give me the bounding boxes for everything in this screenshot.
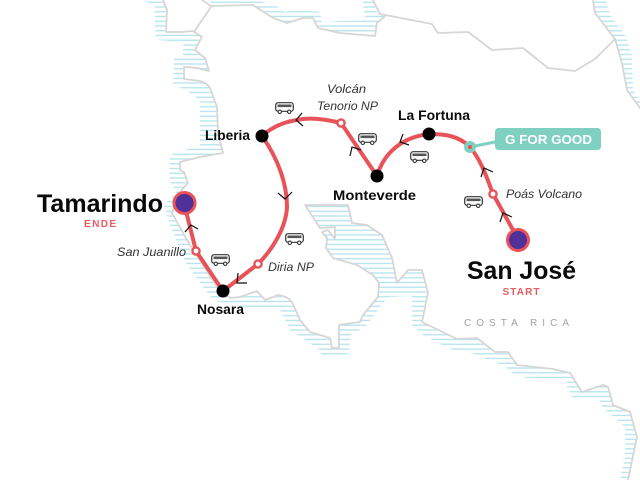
- icon: bus Tenorio to Monteverde: [359, 134, 376, 144]
- icon: bus Monteverde to La Fortuna: [411, 152, 428, 162]
- icon: bus San José to Poás: [465, 197, 482, 208]
- callout: G for Good: [464, 128, 601, 153]
- stop: San Juanillo: [192, 247, 200, 255]
- marker: Monteverde: [370, 170, 384, 182]
- marker: Liberia: [256, 130, 268, 142]
- label: START: START: [502, 287, 540, 298]
- coastline and borders: [163, 0, 640, 480]
- callout: G for Good: G FOR GOOD: [505, 132, 592, 147]
- label: La Fortuna: La Fortuna: [398, 108, 471, 123]
- sea hatching: [140, 0, 640, 480]
- marker: Nosara: [216, 284, 230, 298]
- label: Costa Rica: COSTA RICA: [464, 318, 569, 329]
- label: Liberia: Liberia: [205, 128, 250, 143]
- heading: Tamarindo: Tamarindo: [37, 190, 163, 218]
- marker: Tamarindo end: [174, 192, 195, 214]
- route line: [184, 119, 518, 291]
- label: Volcán: Volcán: [327, 82, 366, 96]
- label: Poás Volcano: Poás Volcano: [506, 187, 582, 201]
- icon: bus San Juanillo: [212, 255, 229, 266]
- icon: bus Diria: [286, 234, 303, 244]
- marker: San José start: [508, 230, 528, 250]
- icon: bus Liberia to Tenorio: [276, 103, 293, 114]
- stop: Poás Volcano: [489, 190, 497, 198]
- label: Monteverde: Monteverde: [333, 188, 417, 203]
- stop: Diria NP: [254, 260, 262, 268]
- label: Tenorio NP: Tenorio NP: [317, 99, 378, 113]
- marker: La Fortuna: [422, 128, 436, 140]
- label: ENDE: ENDE: [84, 219, 116, 230]
- label: Diria NP: Diria NP: [268, 260, 314, 274]
- label: San Juanillo: San Juanillo: [117, 245, 186, 259]
- label: Nosara: Nosara: [197, 302, 244, 317]
- direction arrows: [185, 113, 512, 283]
- heading: San José: San José: [467, 257, 576, 285]
- stop: Volcán Tenorio: [337, 119, 345, 127]
